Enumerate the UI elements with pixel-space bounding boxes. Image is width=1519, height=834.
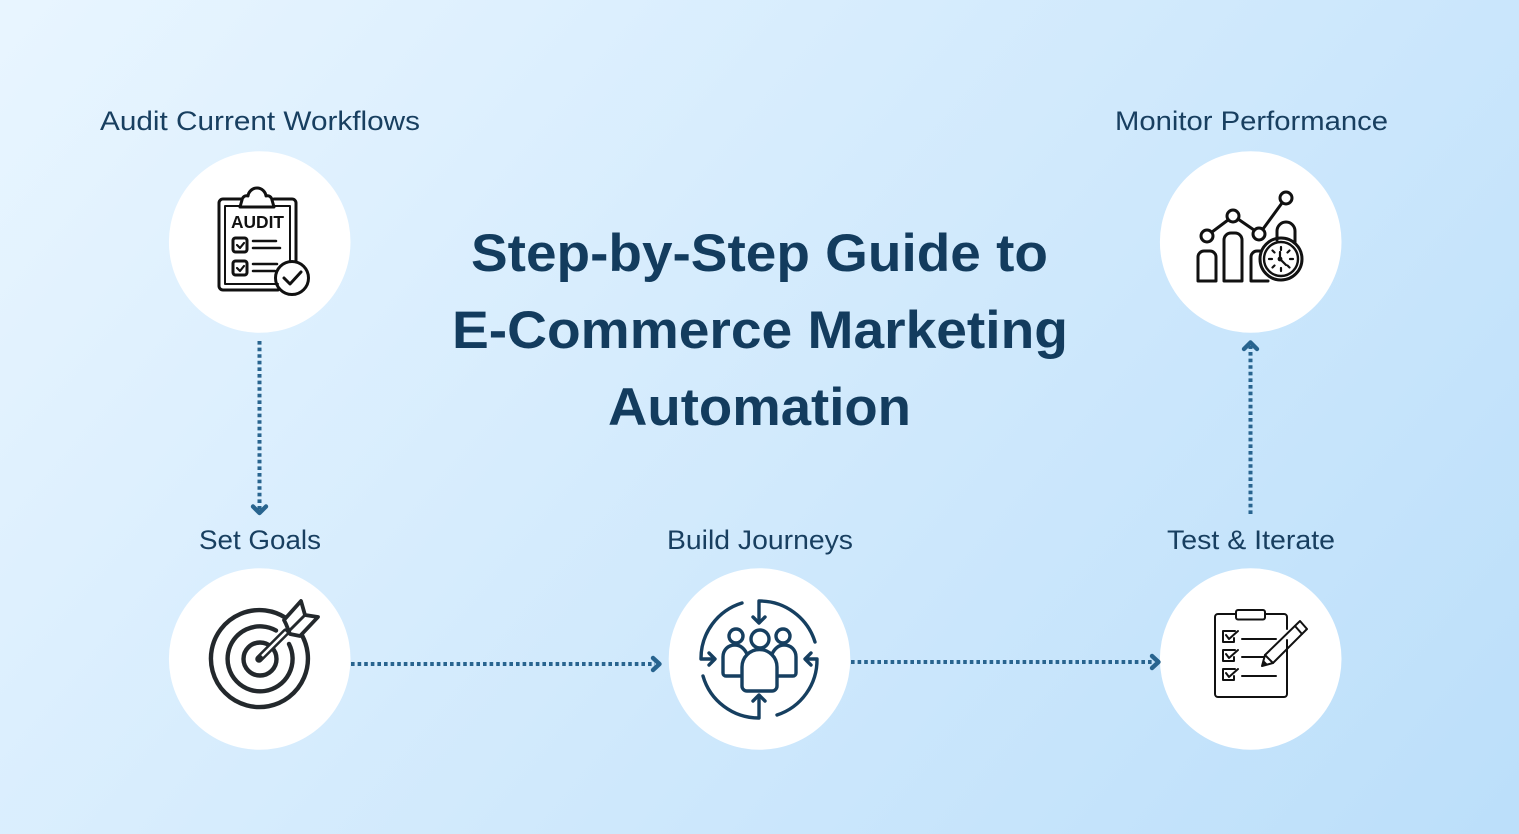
circle: audit [169,151,350,333]
step: set goals [169,525,350,750]
step: monitor performance [1115,106,1388,333]
circle: test and iterate [1160,568,1341,750]
step: audit current workflows [100,106,420,333]
icon: target with arrow [211,601,318,707]
circle: set goals [169,568,350,750]
step: test and iterate [1160,525,1341,750]
title: Automation [608,378,911,437]
circle: monitor [1160,151,1341,333]
arrow: test and iterate to monitor performance [1244,342,1257,514]
icon: checklist with pencil [1215,610,1307,697]
title: Step-by-Step Guide to [471,224,1048,283]
icon: people in cycle [701,601,817,718]
arrow: audit to set goals [253,341,266,513]
title [452,224,1068,437]
title: E-Commerce Marketing [452,301,1068,360]
label: build journeys: Build Journeys [667,525,853,555]
label: set goals: Set Goals [199,525,321,555]
circle: build journeys [669,568,850,750]
icon: chart with clock [1198,192,1302,281]
arrow: set goals to build journeys [351,658,660,670]
label: audit current workflows: Audit Current Workflows [100,106,420,136]
icon: audit clipboard [219,188,308,294]
step: build journeys [667,525,853,750]
icon: audit clipboard: AUDIT [231,212,284,232]
label: test and iterate: Test & Iterate [1167,525,1335,555]
label: monitor performance: Monitor Performance [1115,106,1388,136]
arrow: build journeys to test and iterate [851,656,1158,668]
